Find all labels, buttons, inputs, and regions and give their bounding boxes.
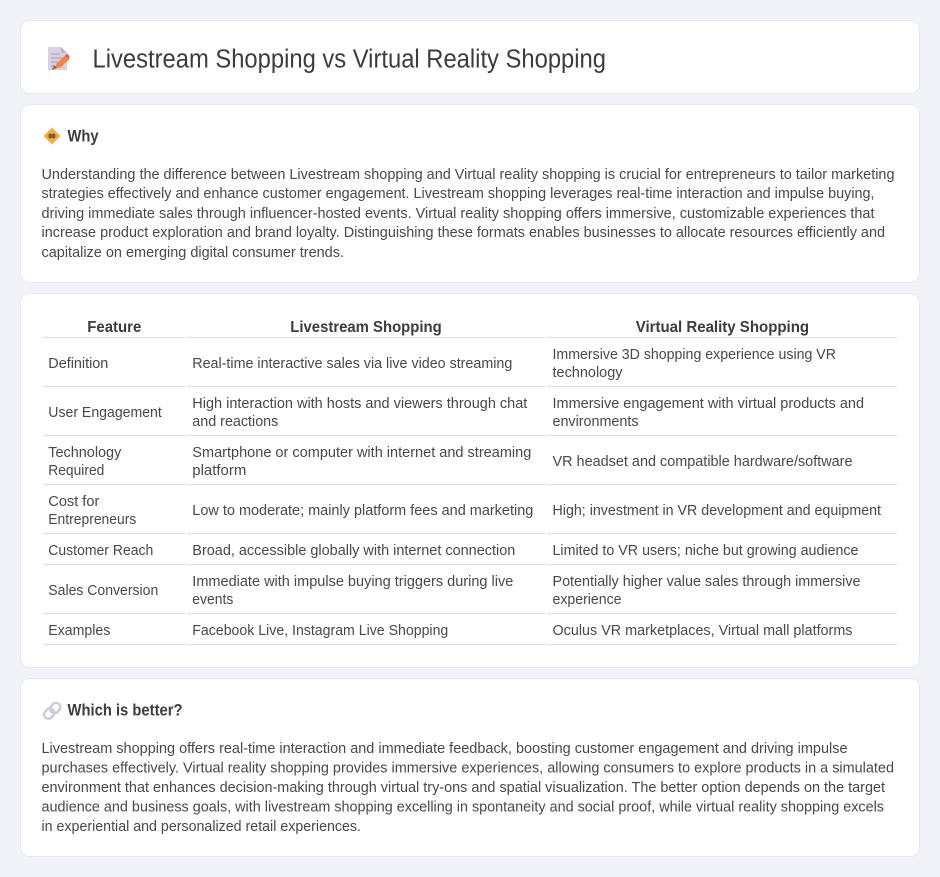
table header row: Virtual Reality Shopping [636,319,809,336]
row: definition [48,347,836,381]
text block: which is better paragraph [42,741,894,835]
heading: which is better: Which is better? [68,702,182,720]
icon: warning diamond [44,128,60,144]
row: customer reach: Customer Reach [48,543,153,559]
row: examples: Examples [48,623,110,639]
panel: which is better [20,678,920,856]
row: definition: Definition [48,356,108,372]
row: cost for entrepreneurs [48,494,881,528]
row: cost for entrepreneurs: Entrepreneurs [48,512,136,528]
text block: why paragraph: capitalize on emerging digital consumer trends. [42,245,344,261]
text block: which is better paragraph: environment that enhances decision-making through virtual try-ons and spatial visualization. The better option depends on the target [42,780,885,796]
table header row: Livestream Shopping [290,319,442,336]
icon: memo with pencil [48,47,70,70]
row: definition: Immersive 3D shopping experience using VR [552,347,836,363]
row: user engagement: Immersive engagement with virtual products and [552,396,864,412]
row: examples: Facebook Live, Instagram Live Shopping [192,623,448,639]
row: examples [48,623,853,639]
panel: comparison table [20,294,920,668]
row: definition: technology [552,365,623,381]
text block: why paragraph [42,167,894,261]
text block: why paragraph: increase product exploration and brand loyalty. Distinguishing these formats enables businesses to allocate resources efficiently and [42,225,885,241]
row: sales conversion: Immediate with impulse buying triggers during live [192,574,513,590]
panel: title header [20,20,920,94]
row: definition: Real-time interactive sales via live video streaming [192,356,512,372]
row: technology required: platform [192,463,246,479]
row: user engagement: environments [552,414,638,430]
row: sales conversion: experience [552,592,622,608]
text block: why paragraph: strategies effectively and enhance customer engagement. Livestream shopping leverages real-time interaction and impulse buying, [42,186,874,202]
row: sales conversion: events [192,592,233,608]
row: cost for entrepreneurs: Cost for [48,494,99,510]
row: technology required: VR headset and compatible hardware/software [552,454,852,470]
row: technology required: Required [48,463,104,479]
table header row: Feature [87,319,141,336]
row: cost for entrepreneurs: Low to moderate; mainly platform fees and marketing [192,503,533,519]
text block: why paragraph: Understanding the difference between Livestream shopping and Virtual reality shopping is crucial for entrepreneurs to tailor marketing [42,167,894,183]
heading: why: Why [68,128,99,146]
row: user engagement [48,396,864,430]
text block: which is better paragraph: purchases effectively. Virtual reality shopping provides immersive experiences, allowing consumers to explore products in a simulated [42,760,894,776]
panel: why [20,104,920,282]
row: user engagement: and reactions [192,414,278,430]
icon: chain link [42,701,62,720]
row: sales conversion [48,574,861,608]
row: user engagement: High interaction with hosts and viewers through chat [192,396,527,412]
row: customer reach: Broad, accessible globally with internet connection [192,543,515,559]
row: technology required [48,445,853,479]
text block: why paragraph: driving immediate sales through influencer-hosted events. Virtual reality shopping offers immersive, customizable experiences that [42,206,874,222]
title: Livestream Shopping vs Virtual Reality Shopping [92,46,606,74]
row: examples: Oculus VR marketplaces, Virtual mall platforms [552,623,852,639]
table header row [87,319,809,336]
row: technology required: Technology [48,445,122,461]
row: sales conversion: Sales Conversion [48,583,158,599]
row: user engagement: User Engagement [48,405,162,421]
row: customer reach: Limited to VR users; niche but growing audience [552,543,858,559]
text block: which is better paragraph: audience and business goals, with livestream shopping excelling in spontaneity and social proof, while virtual reality shopping excels [42,800,884,816]
text block: which is better paragraph: in experiential and personalized retail experiences. [42,819,361,835]
row: customer reach [48,543,859,559]
row: technology required: Smartphone or computer with internet and streaming [192,445,531,461]
row: sales conversion: Potentially higher value sales through immersive [552,574,860,590]
row: cost for entrepreneurs: High; investment in VR development and equipment [552,503,881,519]
text block: which is better paragraph: Livestream shopping offers real-time interaction and immediate feedback, boosting customer engagement and driving impulse [42,741,848,757]
